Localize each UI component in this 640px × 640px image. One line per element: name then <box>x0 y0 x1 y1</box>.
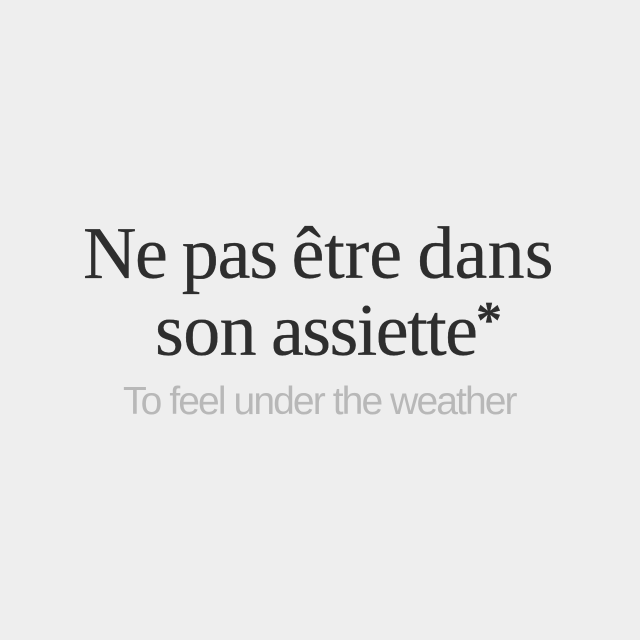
heading: French phrase: assiette <box>271 290 476 372</box>
heading: French phrase: son <box>155 290 256 372</box>
heading: French phrase <box>83 213 554 372</box>
heading: French phrase: * <box>476 292 502 349</box>
subtitle: English translation: To feel under the weather <box>123 380 516 423</box>
heading: French phrase: Ne pas être dans <box>83 213 554 295</box>
